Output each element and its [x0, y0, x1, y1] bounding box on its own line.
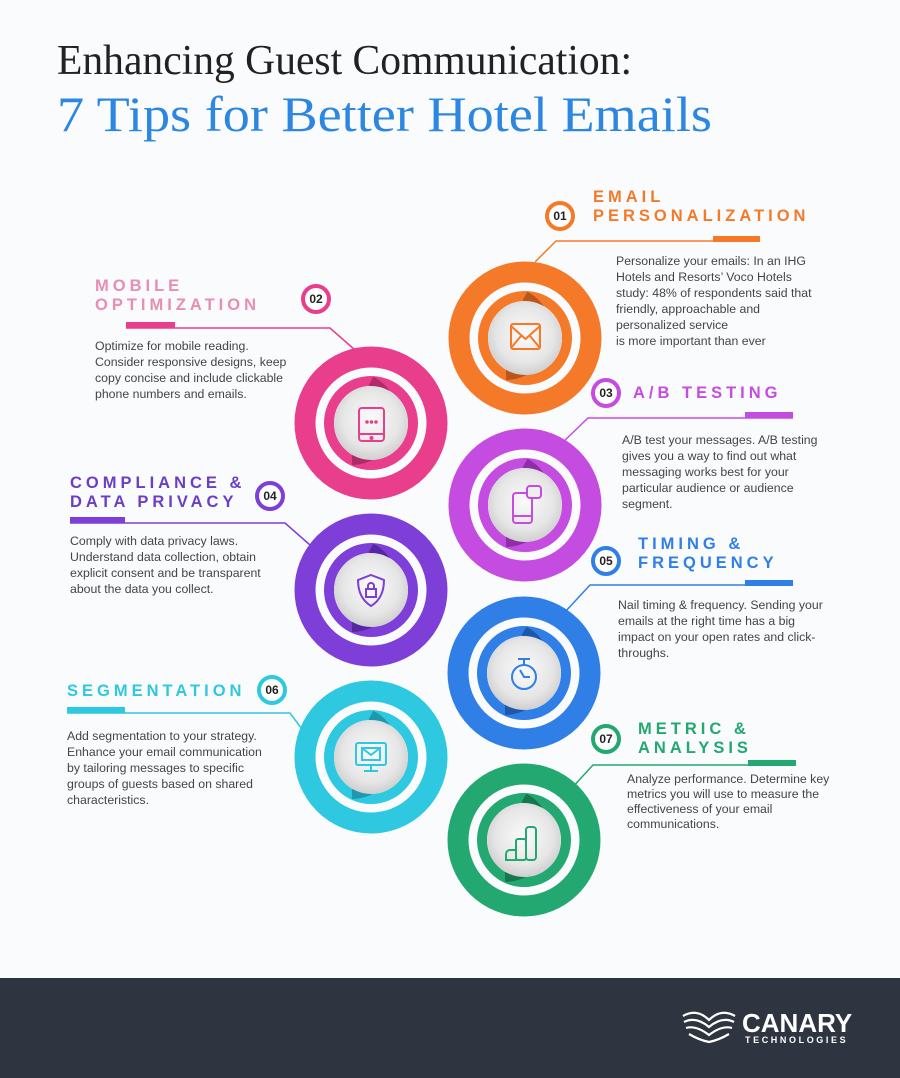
tip 06: segmentation: 06 [265, 683, 279, 697]
tip 01: email personalization: personalized service [616, 318, 728, 332]
title: Enhancing Guest Communication: [57, 38, 632, 84]
tip 07: metric & analysis [458, 720, 830, 906]
tip 05: timing & frequency: 05 [599, 554, 613, 568]
title [57, 38, 712, 142]
tip 04: compliance & data privacy: COMPLIANCE & [70, 474, 245, 492]
tip 03: a/b testing: 03 [599, 386, 613, 400]
tip 04: compliance & data privacy: Understand data collection, obtain [70, 550, 256, 564]
icon: phone chat [513, 486, 541, 523]
tip 01: email personalization: is more important than ever [616, 334, 766, 348]
tip 05: timing & frequency: Nail timing & frequency. Sending your [618, 598, 823, 612]
tip 01: email personalization: EMAIL [593, 188, 664, 206]
tip 02: mobile optimization: Optimize for mobile reading. [95, 339, 249, 353]
tip 07: metric & analysis: ANALYSIS [638, 739, 752, 757]
logo: canary technologies [683, 1008, 852, 1045]
tip 05: timing & frequency: throughs. [618, 646, 669, 660]
tip 02: mobile optimization: 02 [309, 292, 323, 306]
tip 03: a/b testing: particular audience or audience [622, 481, 794, 495]
tip 04: compliance & data privacy: DATA PRIVACY [70, 493, 237, 511]
tip 04: compliance & data privacy: about the data you collect. [70, 582, 214, 596]
icon: envelope [511, 324, 540, 349]
tip 04: compliance & data privacy: 04 [263, 489, 277, 503]
logo: canary technologies: CANARY [742, 1008, 852, 1038]
icon: tablet [359, 408, 384, 441]
tip 07: metric & analysis: METRIC & [638, 720, 750, 738]
tip 05: timing & frequency: emails at the right time has a big [618, 614, 795, 628]
tip 06: segmentation: Enhance your email communication [67, 745, 262, 759]
tip 06: segmentation: groups of guests based on shared [67, 777, 253, 791]
icon: shield lock [358, 575, 384, 606]
tip 06: segmentation [67, 677, 437, 823]
tip 03: a/b testing: segment. [622, 497, 673, 511]
tip 07: metric & analysis: metrics you will use to measure the [627, 787, 819, 801]
footer [0, 978, 900, 1078]
tip 02: mobile optimization: MOBILE [95, 277, 183, 295]
tip 01: email personalization: 01 [553, 209, 567, 223]
tip 05: timing & frequency: impact on your open rates and click- [618, 630, 816, 644]
tip 03: a/b testing: A/B test your messages. A/B testing [622, 433, 818, 447]
icon: bar chart [506, 827, 536, 860]
tip 03: a/b testing: messaging works best for your [622, 465, 789, 479]
tip 01: email personalization: friendly, approachable and [616, 302, 760, 316]
tip 03: a/b testing: A/B TESTING [633, 384, 782, 402]
tip 07: metric & analysis: Analyze performance. Determine key [627, 772, 830, 786]
tip 01: email personalization: study: 48% of respondents said that [616, 286, 812, 300]
icon: monitor mail [356, 743, 386, 771]
tip 05: timing & frequency: FREQUENCY [638, 554, 778, 572]
tip 03: a/b testing [459, 380, 818, 571]
tip 01: email personalization: Personalize your emails: In an IHG [616, 254, 806, 268]
tip 04: compliance & data privacy [70, 474, 437, 656]
tip 02: mobile optimization: copy concise and include clickable [95, 371, 283, 385]
tip 01: email personalization: PERSONALIZATION [593, 207, 809, 225]
title: 7 Tips for Better Hotel Emails [57, 86, 712, 142]
tip 02: mobile optimization [95, 277, 437, 489]
tip 07: metric & analysis: effectiveness of your email [627, 802, 772, 816]
tip 05: timing & frequency: TIMING & [638, 535, 744, 553]
tip 06: segmentation: Add segmentation to your strategy. [67, 729, 257, 743]
tip 05: timing & frequency [458, 535, 823, 739]
tip 01: email personalization [459, 188, 812, 404]
tip 03: a/b testing: gives you a way to find out what [622, 449, 797, 463]
tip 07: metric & analysis: communications. [627, 817, 719, 831]
tip 04: compliance & data privacy: Comply with data privacy laws. [70, 534, 238, 548]
tip 01: email personalization: Hotels and Resorts’ Voco Hotels [616, 270, 792, 284]
tip 02: mobile optimization: phone numbers and emails. [95, 387, 247, 401]
tip 06: segmentation: by tailoring messages to specific [67, 761, 244, 775]
logo: canary technologies: TECHNOLOGIES [745, 1035, 848, 1045]
icon: stopwatch [512, 659, 536, 689]
tip 07: metric & analysis: 07 [599, 732, 613, 746]
tip 06: segmentation: characteristics. [67, 793, 149, 807]
tip 06: segmentation: SEGMENTATION [67, 682, 245, 700]
tip 02: mobile optimization: OPTIMIZATION [95, 296, 260, 314]
tip 02: mobile optimization: Consider responsive designs, keep [95, 355, 287, 369]
tip 04: compliance & data privacy: explicit consent and be transparent [70, 566, 261, 580]
